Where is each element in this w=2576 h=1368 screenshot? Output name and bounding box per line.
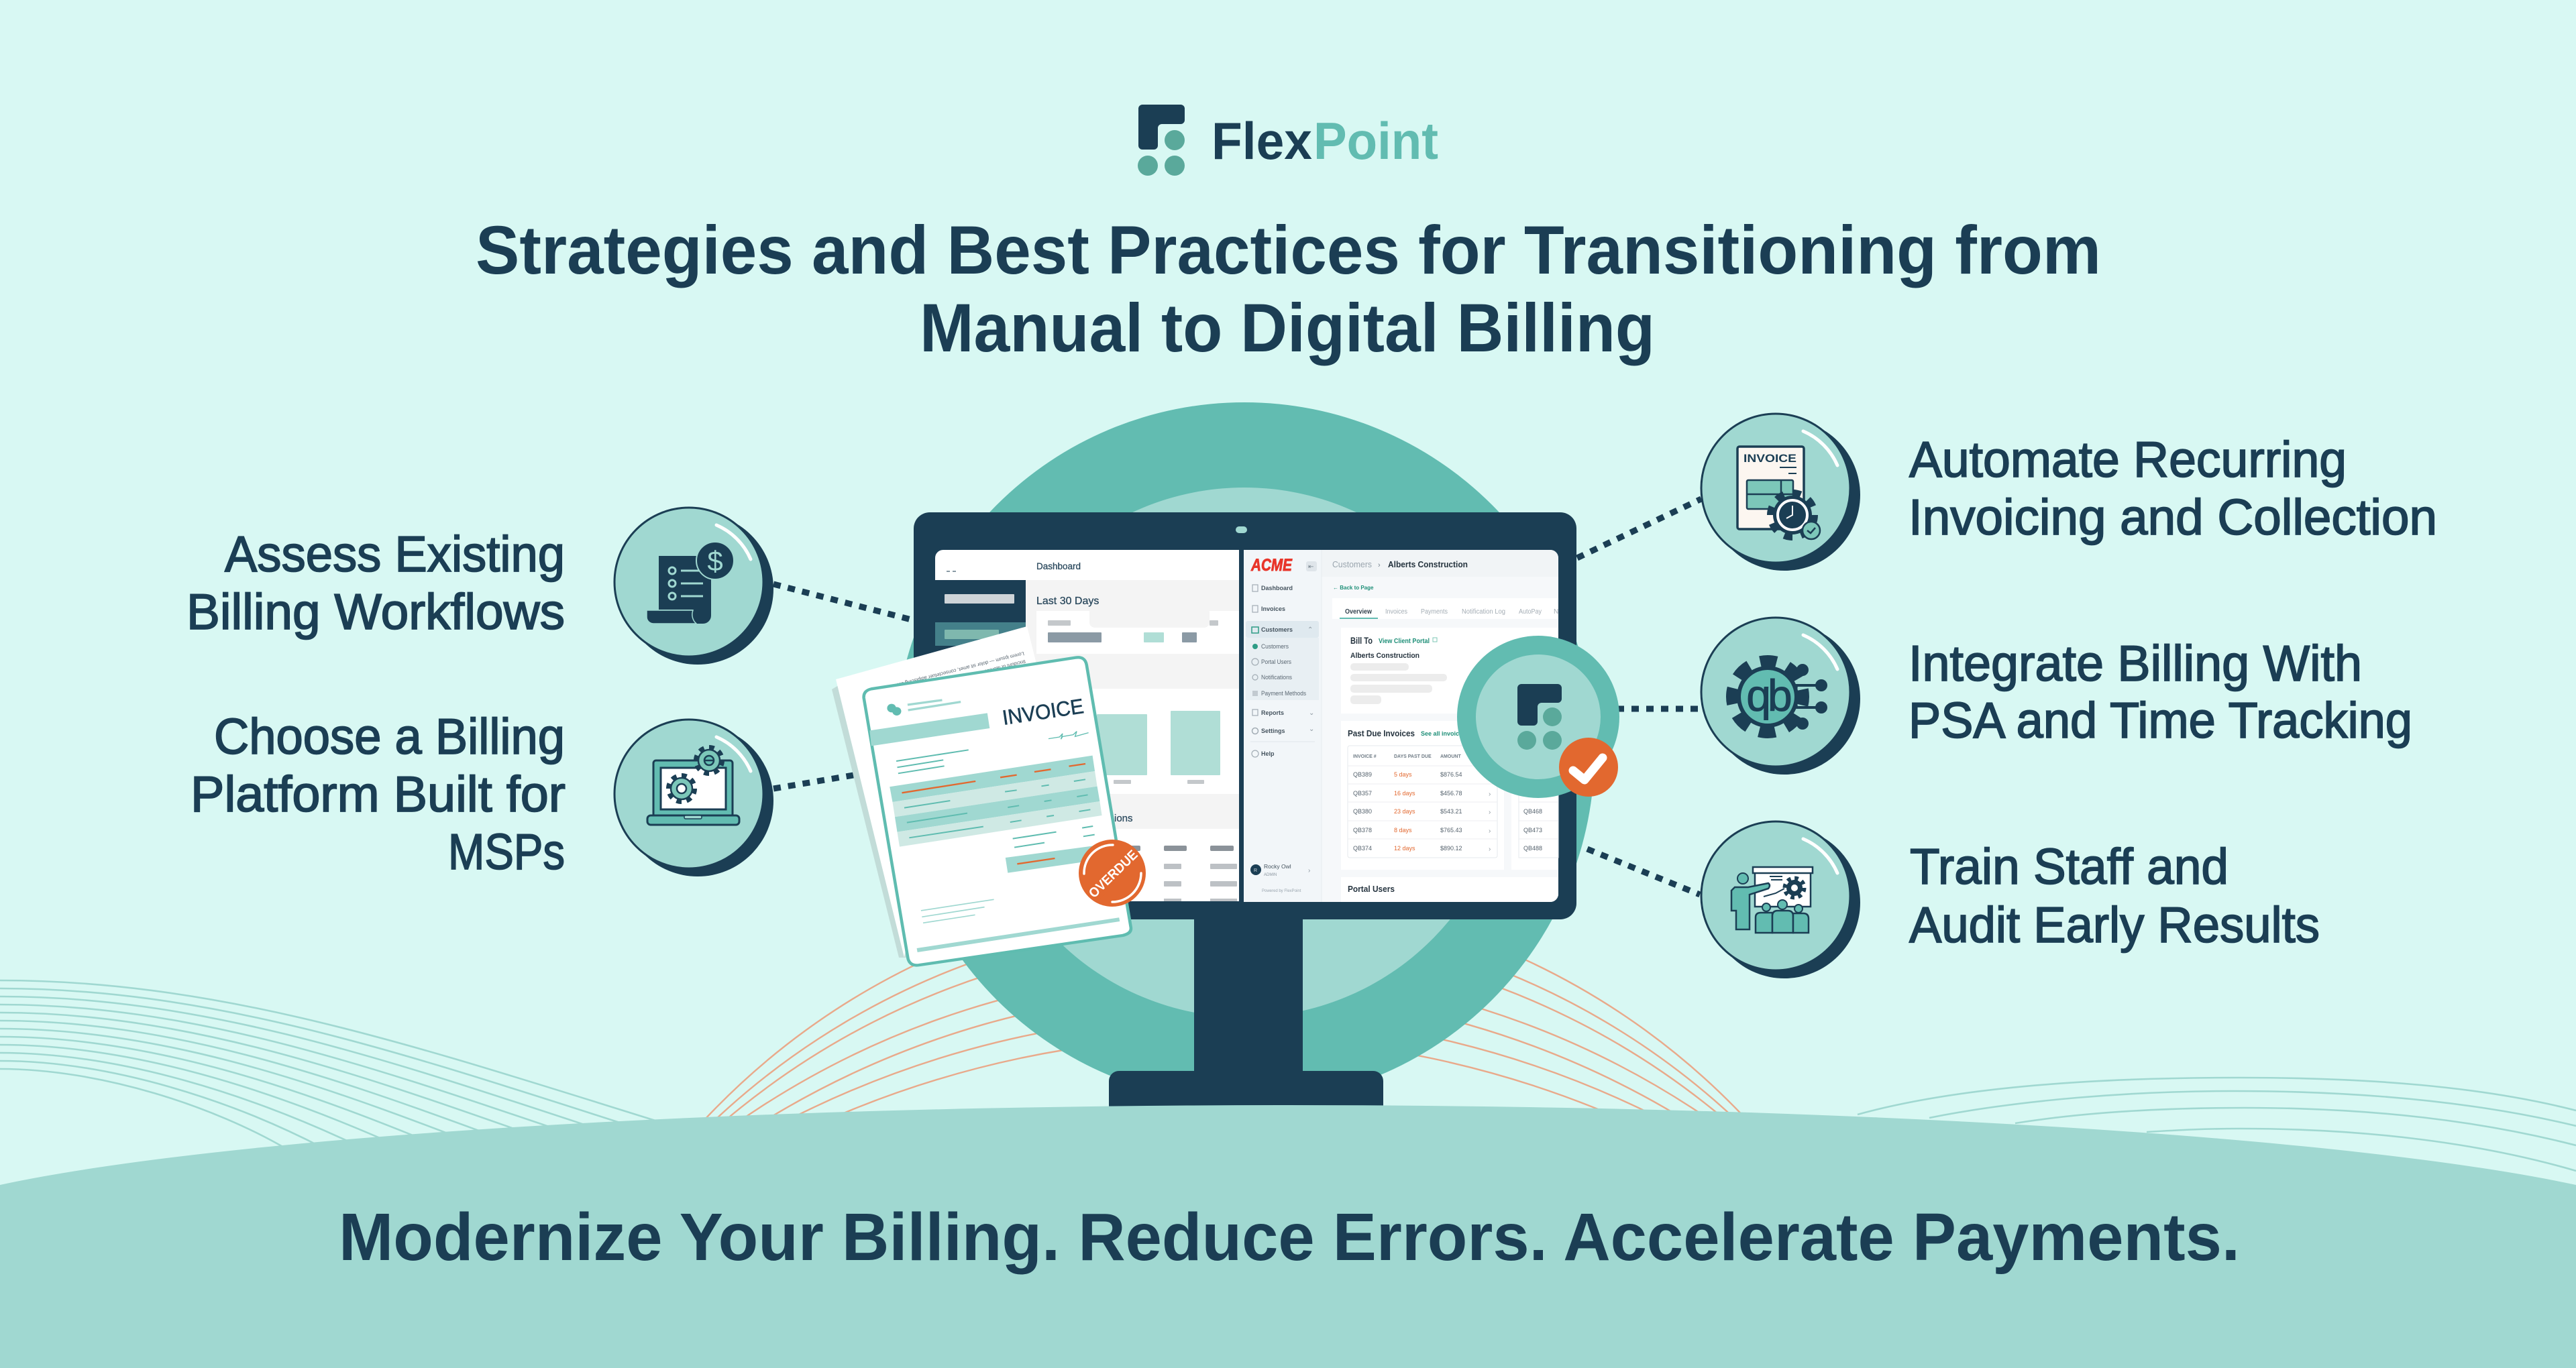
logo: FlexPoint	[1138, 105, 1438, 176]
left screen: dashboard	[935, 550, 1239, 901]
sidebar navigation: ›	[1308, 867, 1310, 874]
past due invoices card: See all invoic	[1421, 730, 1459, 737]
past due invoices card: QB488	[1523, 845, 1542, 852]
past due invoices card: ›	[1489, 791, 1491, 798]
past due invoices card: QB389	[1353, 771, 1372, 778]
connector: choose platform	[773, 775, 853, 789]
tabs: Payments	[1421, 608, 1448, 616]
sidebar navigation: Customers	[1261, 626, 1293, 633]
sidebar navigation: Settings	[1261, 728, 1285, 734]
right screen: customer detail	[1244, 550, 1558, 902]
past due invoices card: INVOICE #	[1353, 754, 1377, 759]
past due invoices card: $876.54	[1440, 771, 1462, 778]
label: automate recurring invoicing: Invoicing and Collection	[1909, 489, 2437, 545]
sidebar navigation: Invoices	[1261, 606, 1285, 612]
past due invoices card: 23 days	[1394, 808, 1415, 815]
sidebar navigation: Help	[1261, 750, 1275, 757]
portal users card	[1341, 877, 1558, 902]
background circle: outer	[894, 402, 1595, 1102]
front invoice	[864, 657, 1131, 965]
label: automate recurring invoicing	[1909, 431, 2437, 545]
bill to card: View Client Portal	[1379, 638, 1430, 645]
back sheet	[832, 626, 1046, 958]
invoice documents	[832, 626, 1146, 965]
right screen: customer detail: ›	[1378, 561, 1381, 569]
past due invoices card: DAYS PAST DUE	[1394, 754, 1432, 759]
label: integrate billing	[1909, 635, 2412, 748]
sidebar navigation: Reports	[1261, 709, 1284, 716]
label: train staff: Audit Early Results	[1909, 897, 2320, 953]
right screen: customer detail: ⇤	[1308, 563, 1313, 571]
sidebar navigation: Notifications	[1261, 674, 1292, 681]
overdue stamp: OVERDUE	[1086, 848, 1141, 901]
past due invoices card: QB374	[1353, 845, 1372, 852]
camera	[1236, 526, 1247, 533]
label: automate recurring invoicing: Automate Recurring	[1909, 431, 2347, 488]
icon: billing receipt: $	[707, 545, 723, 577]
hill footer	[0, 1105, 2576, 1368]
label: choose a billing platform: Platform Built for	[191, 766, 566, 822]
sidebar navigation: Dashboard	[1261, 585, 1293, 591]
past due invoices card: 8 days	[1394, 827, 1412, 834]
past due invoices card: ›	[1489, 809, 1491, 816]
tabs: Overview	[1345, 608, 1372, 616]
monitor frame	[914, 512, 1576, 919]
right screen: customer detail: Alberts Construction	[1388, 559, 1468, 569]
sidebar navigation: ⌄	[1309, 726, 1314, 733]
bill to card	[1341, 628, 1558, 714]
tabs: Invoices	[1385, 608, 1407, 616]
tabs	[1332, 598, 1558, 619]
past due invoices card: 16 days	[1394, 790, 1415, 797]
past due invoices card: $456.78	[1440, 790, 1462, 797]
sidebar navigation: R	[1254, 868, 1257, 873]
connector: integrate billing	[1617, 705, 1700, 712]
icon: laptop with gears	[614, 720, 773, 876]
past due invoices card: QB468	[1523, 808, 1542, 815]
icon: automated invoice: INVOICE	[1743, 452, 1796, 465]
past due invoices card: $890.12	[1440, 845, 1462, 852]
past due invoices card: 12 days	[1394, 845, 1415, 852]
tabs: AutoPay	[1519, 608, 1542, 616]
sidebar navigation: Powered by FlexPoint	[1262, 889, 1301, 893]
label: integrate billing: PSA and Time Tracking	[1909, 692, 2412, 748]
monitor	[914, 512, 1576, 919]
sidebar navigation: Portal Users	[1261, 659, 1291, 665]
left screen: dashboard: ions	[1114, 813, 1133, 824]
back sheet: Lorem ipsum — dolor sit amet, consectetuer adipiscing elit	[896, 650, 1025, 688]
icon: integration gear: qb	[1746, 671, 1790, 720]
tabs: N	[1554, 608, 1558, 616]
label: train staff: Train Staff and	[1910, 838, 2229, 895]
label: train staff	[1909, 838, 2320, 953]
icon: integration gear	[1701, 618, 1860, 775]
back sheet: tincidunt ut laoreet	[984, 659, 1026, 675]
past due invoices card: QB473	[1523, 827, 1542, 834]
badge: FlexPoint logo with check	[1457, 636, 1619, 798]
logo: FlexPoint: Point	[1313, 111, 1438, 170]
left screen: dashboard: Dashboard	[1036, 561, 1081, 571]
connector: assess workflows	[773, 584, 914, 620]
title	[476, 212, 2101, 366]
right screen: customer detail: ← Back to Page	[1333, 585, 1374, 591]
right screen: customer detail: Customers	[1332, 559, 1372, 569]
monitor stand	[1109, 915, 1383, 1113]
connector: train staff	[1587, 849, 1700, 895]
right screen: customer detail: ACME	[1250, 556, 1293, 575]
sidebar navigation: Rocky Owl	[1264, 863, 1291, 870]
title: Manual to Digital Billing	[920, 290, 1655, 366]
footer tagline: Modernize Your Billing. Reduce Errors. Accelerate Payments.	[339, 1200, 2240, 1275]
icon: billing receipt	[614, 508, 773, 665]
sidebar navigation: ⌃	[1307, 626, 1313, 634]
bill to card: Bill To	[1350, 636, 1373, 646]
label: assess existing billing workflows: Assess Existing	[225, 526, 565, 582]
icon: automated invoice	[1701, 414, 1860, 571]
icon: training presentation	[1701, 821, 1860, 978]
portal users card: Portal Users	[1348, 884, 1395, 894]
label: choose a billing platform	[191, 708, 566, 880]
past due invoices card: ›	[1489, 846, 1491, 853]
tabs: Notification Log	[1462, 608, 1505, 616]
past due invoices card: QB380	[1353, 808, 1372, 815]
past due invoices card: 5 days	[1394, 771, 1412, 778]
past due invoices card: ›	[1489, 828, 1491, 835]
past due invoices card: AMOUNT	[1440, 754, 1461, 759]
sidebar navigation: ADMIN	[1264, 873, 1277, 877]
sidebar navigation: Payment Methods	[1261, 690, 1306, 697]
sidebar navigation: Customers	[1261, 643, 1289, 650]
past due invoices card	[1341, 721, 1558, 870]
label: choose a billing platform: Choose a Billing	[214, 708, 565, 764]
bill to card: Alberts Construction	[1350, 652, 1419, 660]
title: Strategies and Best Practices for Transitioning from	[476, 212, 2101, 288]
invoice heading: INVOICE	[1001, 694, 1085, 730]
label: assess existing billing workflows: Billing Workflows	[186, 583, 565, 640]
sidebar navigation: ⌄	[1309, 709, 1314, 717]
logo: FlexPoint: Flex	[1212, 111, 1312, 170]
background circle: inner	[979, 488, 1509, 1017]
past due invoices card: $765.43	[1440, 827, 1462, 834]
label: choose a billing platform: MSPs	[448, 823, 565, 880]
past due invoices card: QB378	[1353, 827, 1372, 834]
past due invoices card: Past Due Invoices	[1348, 728, 1415, 738]
label: integrate billing: Integrate Billing With	[1909, 635, 2362, 691]
left screen: dashboard: Last 30 Days	[1036, 595, 1099, 607]
past due invoices card: QB357	[1353, 790, 1372, 797]
sidebar navigation	[1246, 585, 1319, 893]
past due invoices card: $543.21	[1440, 808, 1462, 815]
connector: automate invoicing	[1577, 499, 1701, 558]
label: assess existing billing workflows	[186, 526, 565, 640]
